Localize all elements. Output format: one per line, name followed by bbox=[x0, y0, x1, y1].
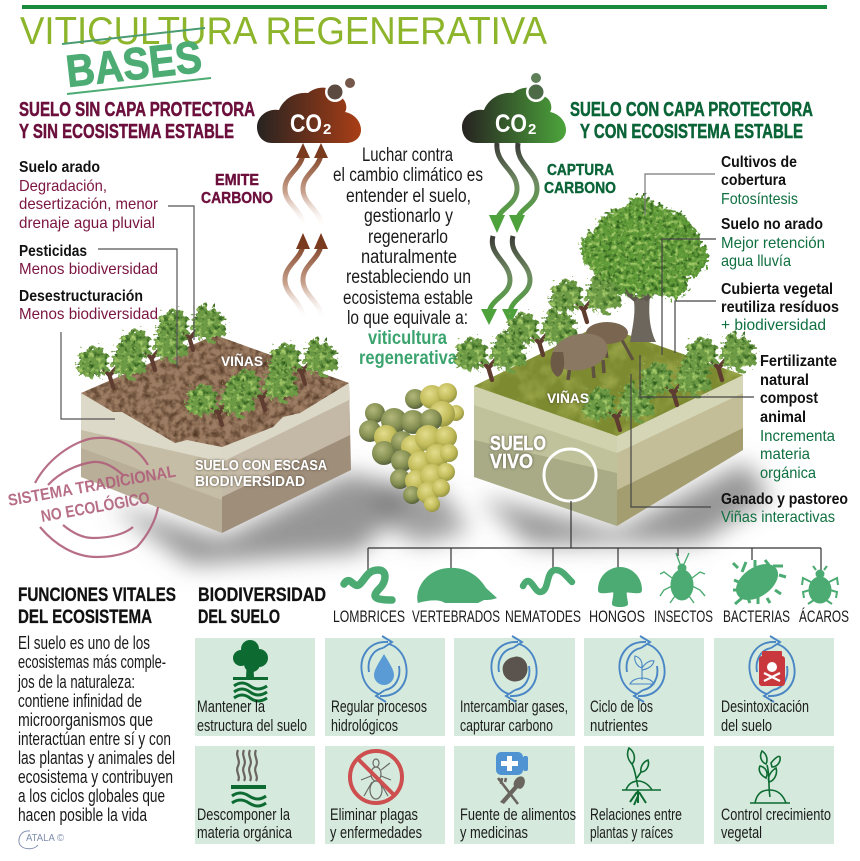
label: captures carbon: CARBONO bbox=[544, 180, 616, 197]
function text row 2: plantas y raíces bbox=[590, 823, 673, 842]
heading: protected soil bbox=[570, 98, 813, 143]
left annotations: Suelo arado bbox=[19, 159, 100, 176]
function text row 2: Relaciones entre bbox=[590, 805, 682, 824]
soil shadows bbox=[110, 462, 770, 565]
function text row 1: Regular procesos bbox=[331, 697, 427, 716]
icon: insect bbox=[660, 553, 705, 603]
body text: las plantas y animales del bbox=[18, 748, 175, 768]
body text: interactúan entre sí y con bbox=[18, 729, 171, 749]
label: captures carbon: CAPTURA bbox=[547, 162, 614, 179]
body text: El suelo es uno de los bbox=[18, 633, 150, 653]
icon: plant growth control bbox=[750, 751, 790, 803]
function panels row 2 bbox=[195, 746, 834, 844]
left annotations: Menos biodiversidad bbox=[19, 261, 158, 278]
function text row 1: Intercambiar gases, bbox=[460, 697, 568, 716]
heading: vital functions bbox=[18, 585, 176, 628]
central text: el cambio climático es bbox=[333, 165, 483, 186]
stamp: traditional system: SISTEMA TRADICIONAL bbox=[7, 463, 177, 510]
icon: vertebrate mole bbox=[417, 568, 497, 603]
icon: earthworms bbox=[344, 570, 392, 600]
right annotations: animal bbox=[760, 409, 806, 426]
right annotations: agua lluvía bbox=[721, 253, 791, 270]
soil block: without cover bbox=[77, 305, 351, 533]
central text bbox=[333, 145, 483, 369]
biodiversity labels bbox=[333, 607, 849, 626]
icon: gas exchange bbox=[491, 636, 537, 702]
function text row 2 bbox=[197, 805, 831, 842]
left annotations: drenaje agua pluvial bbox=[19, 215, 155, 232]
function text row 1 bbox=[197, 697, 809, 735]
stamp: traditional system bbox=[7, 438, 177, 557]
function text row 2: Fuente de alimentos bbox=[460, 805, 576, 824]
bases stamp heading: BASES bbox=[63, 31, 204, 97]
right annotations: Cubierta vegetal bbox=[721, 281, 833, 298]
heading: vital functions: FUNCIONES VITALES bbox=[18, 585, 176, 606]
icon: decompose organic matter bbox=[231, 750, 266, 806]
icon: grape bunch bbox=[359, 383, 464, 512]
biodiversity labels: NEMATODES bbox=[505, 607, 581, 626]
function text row 2: y medicinas bbox=[460, 823, 528, 842]
left annotations: Menos biodiversidad bbox=[19, 306, 158, 323]
body text: ecosistema y contribuyen bbox=[18, 767, 173, 787]
central text: regenerativa bbox=[359, 348, 457, 369]
central text: Luchar contra bbox=[362, 145, 453, 166]
biodiversity labels: INSECTOS bbox=[654, 607, 713, 626]
icon: mite bbox=[802, 566, 838, 604]
label: emits carbon: CARBONO bbox=[201, 190, 273, 207]
biodiversity labels: VERTEBRADOS bbox=[412, 607, 500, 626]
biodiversity labels: LOMBRICES bbox=[333, 607, 405, 626]
label: living soil: VIVO bbox=[490, 451, 533, 473]
icon: sheep bbox=[549, 322, 633, 380]
title: VITICULTURA REGENERATIVA bbox=[20, 10, 547, 53]
label: living soil: SUELO bbox=[490, 433, 546, 455]
icon: nutrient cycle bbox=[619, 636, 665, 702]
left annotations: Pesticidas bbox=[19, 243, 87, 260]
body text: contiene infinidad de bbox=[18, 691, 142, 711]
function text row 1: estructura del suelo bbox=[197, 716, 307, 735]
logo: author credit bbox=[19, 831, 65, 849]
right annotations bbox=[721, 154, 848, 526]
body text: ecosistemas más comple- bbox=[18, 652, 166, 672]
heading: soil biodiversity: BIODIVERSIDAD bbox=[198, 585, 326, 606]
body text: hacen posible la vida bbox=[18, 805, 148, 825]
icon: emitting CO2 cloud bbox=[257, 78, 361, 143]
icon: capturing CO2 cloud bbox=[462, 73, 566, 143]
label: captures carbon bbox=[544, 162, 616, 197]
right annotations: Fotosíntesis bbox=[721, 191, 798, 208]
right annotations: Viñas interactivas bbox=[721, 509, 835, 526]
function text row 1: nutrientes bbox=[590, 716, 648, 735]
vine front right bbox=[583, 383, 655, 430]
function text row 2: Descomponer la bbox=[197, 805, 290, 824]
function text row 1: capturar carbono bbox=[460, 716, 553, 735]
function text row 1: del suelo bbox=[721, 716, 772, 735]
heading: soil biodiversity: DEL SUELO bbox=[198, 607, 280, 628]
left annotations bbox=[19, 159, 159, 323]
right annotations: orgánica bbox=[760, 465, 816, 482]
icon: mushroom bbox=[598, 567, 642, 607]
central text: naturalmente bbox=[361, 247, 457, 268]
label: living soil bbox=[490, 433, 546, 473]
function text row 1: Ciclo de los bbox=[590, 697, 653, 716]
biodiversity labels: BACTERIAS bbox=[723, 607, 790, 626]
label: emits carbon bbox=[201, 172, 273, 207]
label: emits carbon: EMITE bbox=[215, 172, 259, 189]
right annotations: Fertilizante bbox=[760, 353, 837, 370]
right annotations: Cultivos de bbox=[721, 154, 797, 171]
central text: viticultura bbox=[368, 328, 447, 349]
icon: emitting CO2 cloud: CO bbox=[290, 110, 322, 138]
central text: entender el suelo, bbox=[346, 186, 471, 207]
icon: capturing CO2 cloud: 2 bbox=[528, 121, 536, 138]
icon: soil structure tree bbox=[233, 640, 268, 701]
body text bbox=[17, 633, 175, 825]
central text: restableciendo un bbox=[346, 267, 471, 288]
function text row 2: y enfermedades bbox=[330, 823, 422, 842]
arrows: carbon rising bbox=[285, 143, 328, 320]
body text: microorganismos que bbox=[18, 710, 153, 730]
right annotations: reutiliza resíduos bbox=[721, 299, 839, 316]
right annotations: materia bbox=[760, 446, 810, 463]
icon: tree bbox=[580, 196, 708, 342]
leader lines left bbox=[61, 206, 194, 419]
function text row 1: Desintoxicación bbox=[721, 697, 809, 716]
top rule bbox=[22, 5, 827, 9]
heading: unprotected soil: SUELO SIN CAPA PROTECTORA bbox=[19, 98, 255, 121]
function panels row 1 bbox=[195, 638, 834, 736]
biodiversity tree connectors bbox=[368, 501, 821, 572]
logo: author credit: ATALA © bbox=[26, 833, 65, 844]
icon: food and medicine bbox=[496, 752, 528, 804]
central text: gestionarlo y bbox=[364, 206, 453, 227]
stamp: traditional system: NO ECOLÓGICO bbox=[39, 488, 151, 526]
left annotations: desertización, menor bbox=[19, 196, 159, 213]
function text row 2: vegetal bbox=[721, 823, 762, 842]
icon: pest control bbox=[350, 751, 402, 803]
right annotations: compost bbox=[760, 390, 819, 407]
right annotations: Mejor retención bbox=[721, 235, 825, 252]
label: poor biodiversity soil: BIODIVERSIDAD bbox=[195, 473, 305, 490]
icon: detox bbox=[749, 636, 795, 702]
left annotations: Desestructuración bbox=[19, 288, 143, 305]
soil block: with cover bbox=[474, 325, 743, 526]
icon: plant root relations bbox=[622, 748, 661, 805]
right annotations: Suelo no arado bbox=[721, 216, 823, 233]
right annotations: Incrementa bbox=[760, 428, 835, 445]
soil sample circle bbox=[544, 449, 596, 501]
function text row 1: hidrológicos bbox=[331, 716, 398, 735]
right annotations: + biodiversidad bbox=[721, 317, 826, 334]
label: poor biodiversity soil: SUELO CON ESCASA bbox=[195, 457, 327, 474]
heading: soil biodiversity bbox=[198, 585, 326, 628]
leader lines right bbox=[631, 174, 754, 507]
right annotations: natural bbox=[760, 372, 809, 389]
label: poor biodiversity soil bbox=[195, 457, 327, 490]
icon: capturing CO2 cloud: CO bbox=[495, 110, 527, 138]
body text: a los ciclos globales que bbox=[18, 786, 165, 806]
icon: emitting CO2 cloud: 2 bbox=[323, 121, 331, 138]
body text: jos de la naturaleza: bbox=[17, 672, 135, 692]
left annotations: Degradación, bbox=[19, 178, 107, 195]
function text row 2: materia orgánica bbox=[197, 823, 292, 842]
vines right bbox=[455, 275, 757, 405]
function text row 2: Eliminar plagas bbox=[330, 805, 418, 824]
heading: unprotected soil bbox=[19, 98, 255, 143]
heading: vital functions: DEL ECOSISTEMA bbox=[18, 607, 152, 628]
right annotations: cobertura bbox=[721, 172, 786, 189]
heading: unprotected soil: Y SIN ECOSISTEMA ESTABLE bbox=[19, 120, 234, 143]
icon: nematode bbox=[523, 570, 572, 592]
icon: water cycle bbox=[361, 636, 407, 702]
label: vines right: VIÑAS bbox=[547, 389, 589, 406]
central text: ecosistema estable bbox=[343, 288, 473, 309]
label: vines left: VIÑAS bbox=[221, 352, 263, 369]
arrows: carbon sinking bbox=[481, 143, 537, 325]
central text: lo que equivale a: bbox=[347, 308, 468, 329]
icon: bacteria bbox=[730, 557, 786, 607]
function text row 1: Mantener la bbox=[197, 697, 265, 716]
central text: regenerarlo bbox=[368, 227, 448, 248]
biodiversity labels: HONGOS bbox=[589, 607, 645, 626]
